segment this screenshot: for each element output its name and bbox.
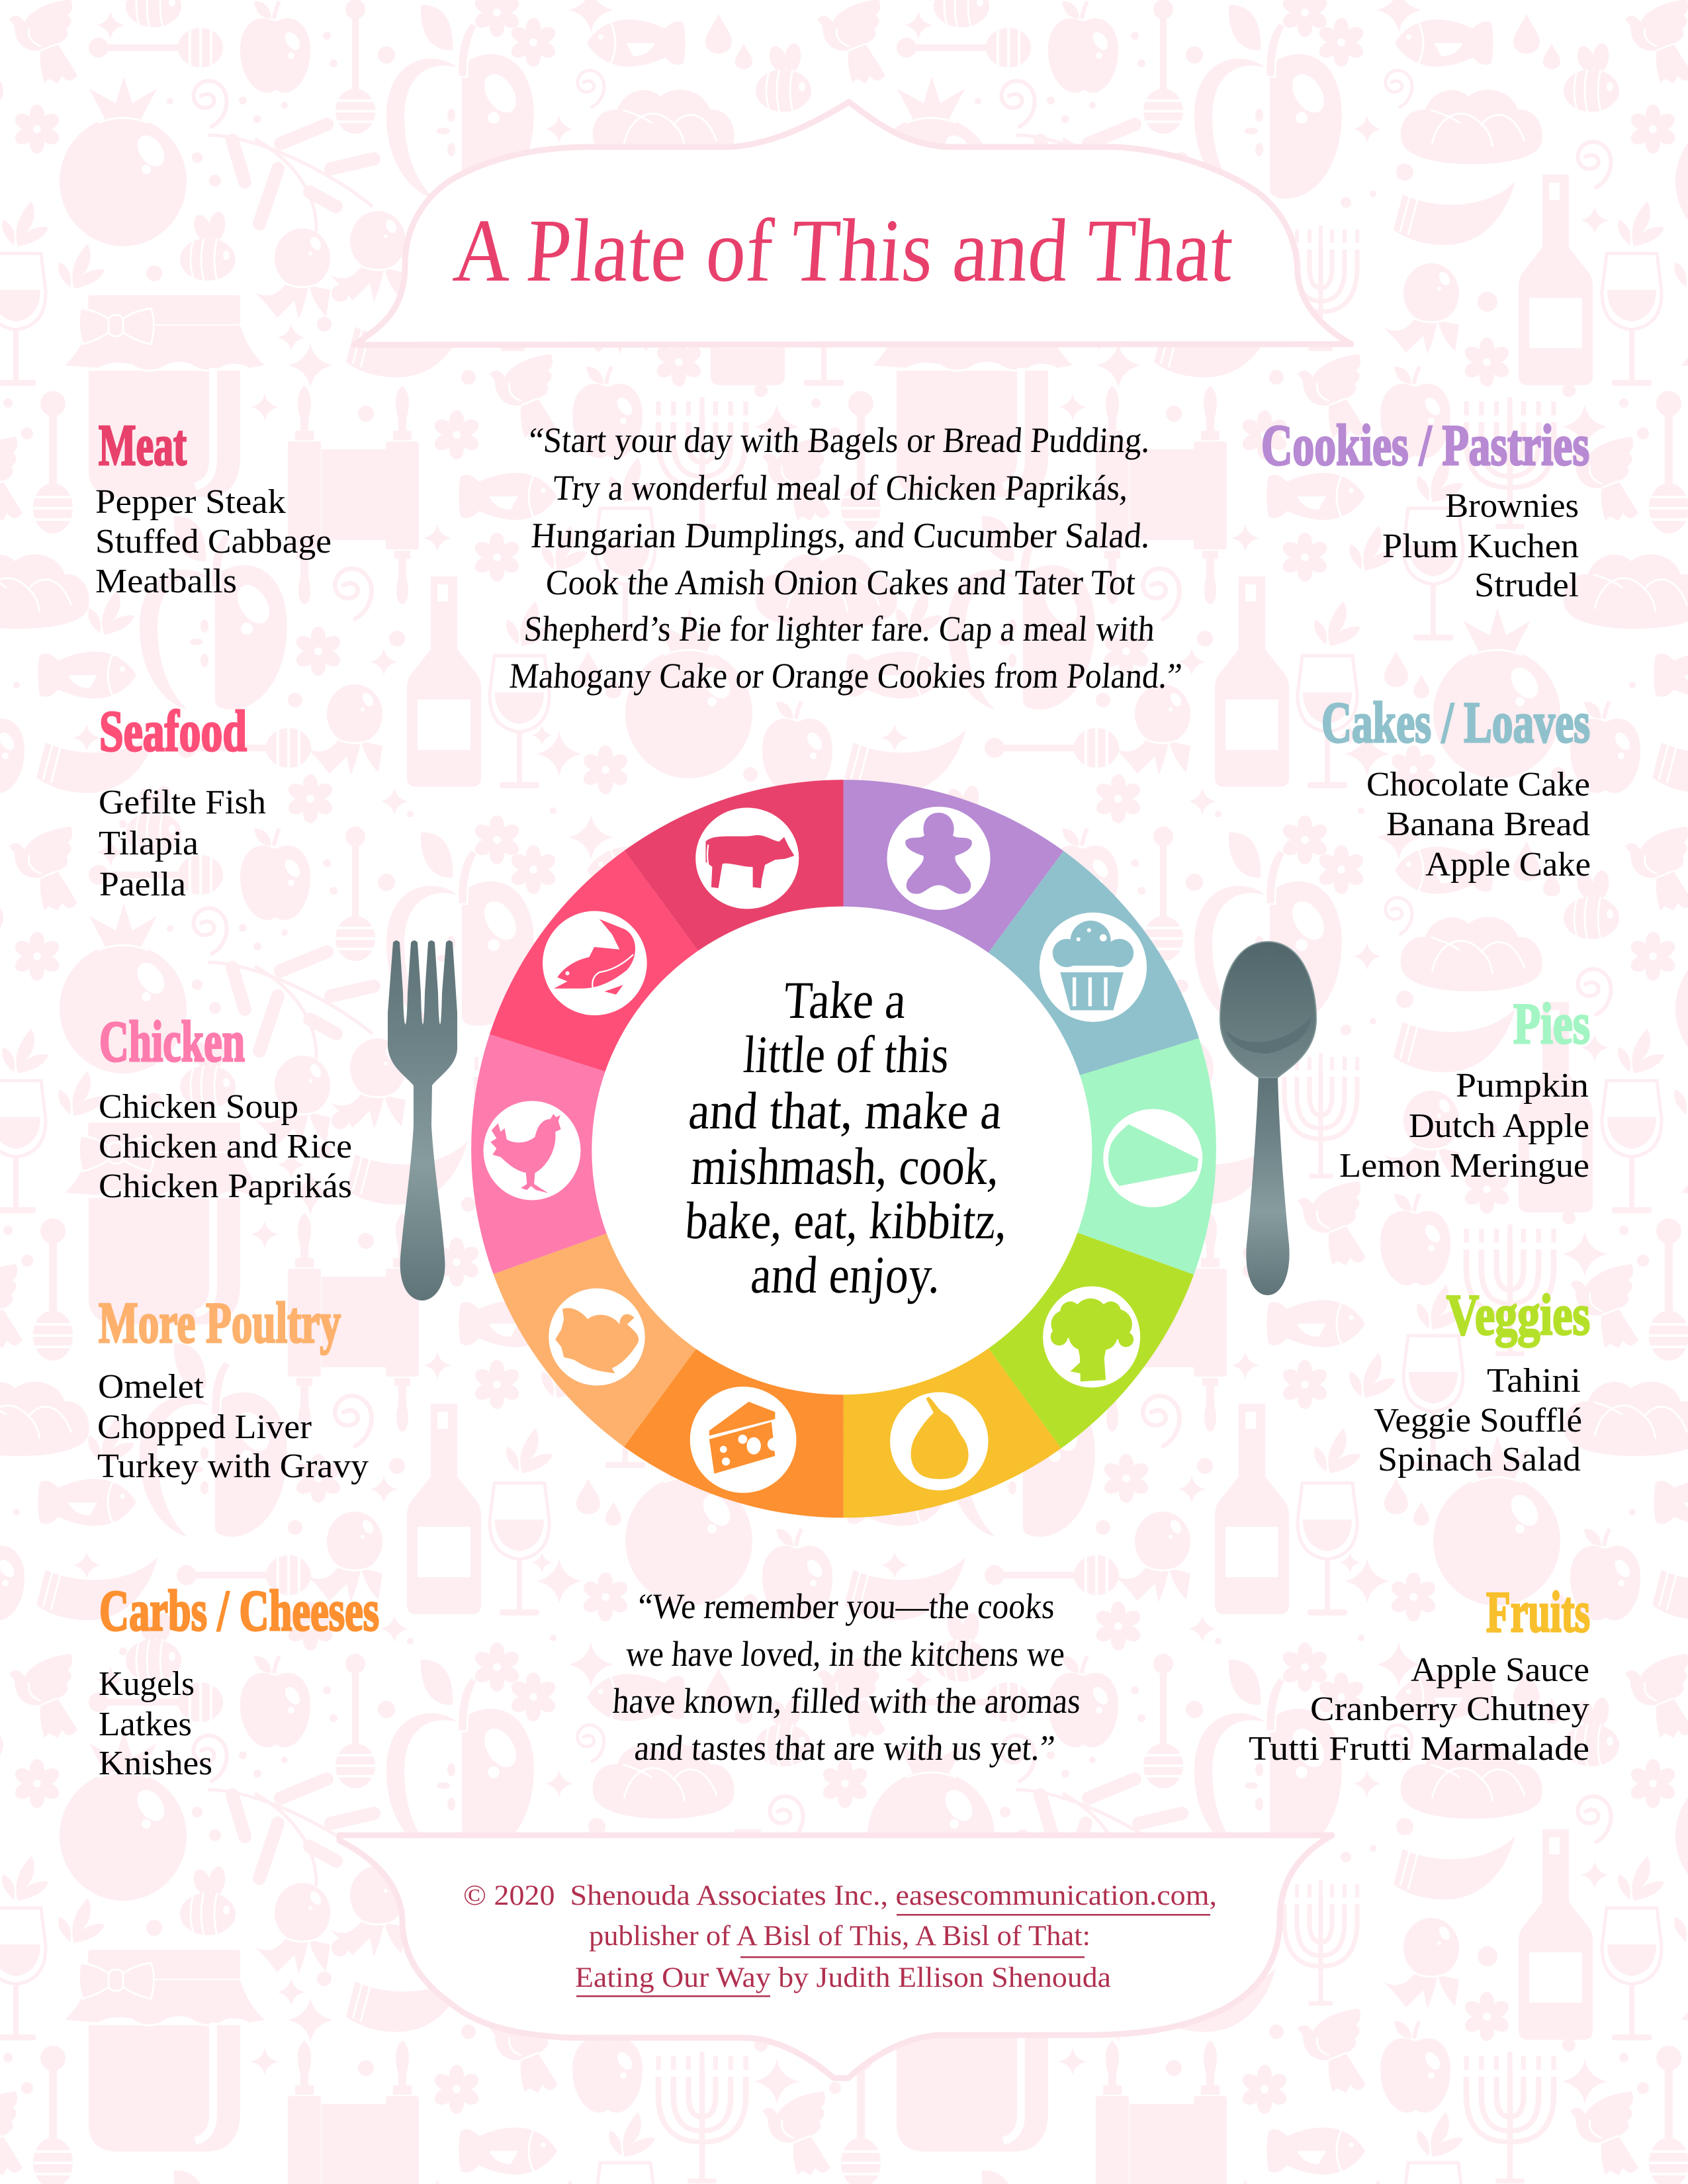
bottom quote: “We remember you—the cooks <box>637 1586 1056 1626</box>
heading: Chicken: Chicken <box>99 1010 245 1074</box>
list: Meat: Pepper Steak <box>95 483 286 521</box>
icon: spoon <box>1220 942 1316 1295</box>
top quote <box>508 420 1183 696</box>
list: Veggies: Veggie Soufflé <box>1374 1402 1582 1439</box>
plate center text: bake, eat, kibbitz, <box>684 1192 1009 1250</box>
list: Carbs / Cheeses <box>99 1665 212 1782</box>
list: Pies <box>1339 1067 1589 1185</box>
list: Chicken: Chicken Paprikás <box>99 1167 352 1205</box>
plate center text: mishmash, cook, <box>689 1138 1001 1196</box>
bottom quote: and tastes that are with us yet.” <box>633 1728 1056 1768</box>
plate center text: and that, make a <box>687 1082 1004 1140</box>
icon: cupcake <box>1040 913 1147 1022</box>
plate center text <box>684 972 1009 1304</box>
title: A Plate of This and That <box>451 201 1236 300</box>
list: Cakes / Loaves: Banana Bread <box>1386 805 1590 843</box>
icon: broccoli <box>1043 1287 1140 1388</box>
title plaque <box>354 102 1351 345</box>
top quote: Shepherd’s Pie for lighter fare. Cap a meal with <box>523 609 1156 649</box>
list: Chicken: Chicken and Rice <box>99 1128 352 1165</box>
bottom quote: we have loved, in the kitchens we <box>625 1634 1066 1674</box>
plate wheel <box>471 780 1216 1518</box>
icon: pear <box>890 1392 989 1490</box>
list: Veggies <box>1374 1362 1582 1479</box>
list: Seafood: Paella <box>99 866 186 903</box>
list: Meat: Stuffed Cabbage <box>95 523 332 561</box>
heading: Meat: Meat <box>99 414 187 478</box>
list: Meat: Meatballs <box>95 563 237 600</box>
list: More Poultry: Turkey with Gravy <box>97 1447 369 1485</box>
list: Fruits: Apple Sauce <box>1411 1651 1589 1689</box>
list: Chicken <box>99 1088 352 1205</box>
list: Meat <box>95 483 332 600</box>
list: Pies: Lemon Meringue <box>1339 1147 1589 1185</box>
footer plaque <box>339 1835 1332 2078</box>
wheel segments <box>471 780 1216 1518</box>
icon: cheese <box>690 1387 796 1493</box>
list: Pies: Dutch Apple <box>1409 1107 1589 1145</box>
icon: fish <box>543 911 647 1015</box>
list: Fruits: Tutti Frutti Marmalade <box>1249 1730 1589 1768</box>
list: Cookies / Pastries <box>1382 487 1579 604</box>
list: Cakes / Loaves: Chocolate Cake <box>1366 766 1590 803</box>
list: Pies: Pumpkin <box>1456 1067 1589 1105</box>
bottom quote: have known, filled with the aromas <box>611 1681 1082 1721</box>
heading: More Poultry: More Poultry <box>99 1291 341 1355</box>
list: Veggies: Tahini <box>1487 1362 1581 1400</box>
list: Fruits <box>1249 1651 1589 1768</box>
list: Cookies / Pastries: Brownies <box>1445 487 1579 525</box>
heading: Cookies / Pastries: Cookies / Pastries <box>1261 414 1589 478</box>
list: Cakes / Loaves: Apple Cake <box>1425 846 1591 884</box>
list: Chicken: Chicken Soup <box>99 1088 298 1126</box>
top quote: “Start your day with Bagels or Bread Pudding. <box>527 420 1151 460</box>
list: Veggies: Spinach Salad <box>1378 1441 1581 1479</box>
list: Carbs / Cheeses: Kugels <box>99 1665 195 1703</box>
list: Carbs / Cheeses: Latkes <box>99 1706 192 1743</box>
heading: Fruits: Fruits <box>1486 1580 1590 1645</box>
list: Seafood: Tilapia <box>99 825 199 862</box>
top quote: Hungarian Dumplings, and Cucumber Salad. <box>530 516 1151 555</box>
icon: fork <box>388 940 457 1300</box>
plate center text: Take a <box>782 972 908 1030</box>
heading: Cakes / Loaves: Cakes / Loaves <box>1321 691 1590 755</box>
heading: Pies: Pies <box>1513 992 1590 1056</box>
heading: Veggies: Veggies <box>1446 1283 1590 1347</box>
icon: turkey <box>549 1289 645 1386</box>
plate center text: little of this <box>742 1026 951 1084</box>
list: Cookies / Pastries: Plum Kuchen <box>1382 527 1579 565</box>
list: Seafood: Gefilte Fish <box>99 784 266 821</box>
top quote: Mahogany Cake or Orange Cookies from Poland.” <box>508 656 1183 696</box>
list: Cookies / Pastries: Strudel <box>1474 567 1579 604</box>
heading: Carbs / Cheeses: Carbs / Cheeses <box>99 1579 379 1643</box>
footer credits <box>463 1880 1217 1997</box>
top quote: Cook the Amish Onion Cakes and Tater Tot <box>545 563 1137 602</box>
icon: cow <box>695 807 799 909</box>
heading: Seafood: Seafood <box>99 700 247 764</box>
top quote: Try a wonderful meal of Chicken Paprikás, <box>552 468 1130 508</box>
icon: gingerbread cookie <box>887 807 991 910</box>
list: More Poultry: Chopped Liver <box>97 1408 312 1446</box>
bottom quote <box>611 1586 1082 1768</box>
plate center text: and enjoy. <box>749 1246 942 1304</box>
footer credits: © 2020 Shenouda Associates Inc., easescommunication.com, <box>463 1880 1217 1911</box>
icon: hen <box>484 1101 580 1200</box>
footer credits: publisher of A Bisl of This, A Bisl of That: <box>589 1921 1090 1952</box>
list: Seafood <box>99 784 266 903</box>
icon: pie slice <box>1103 1109 1202 1207</box>
footer credits: Eating Our Way by Judith Ellison Shenouda <box>575 1962 1111 1993</box>
list: Fruits: Cranberry Chutney <box>1310 1690 1589 1728</box>
list: Carbs / Cheeses: Knishes <box>99 1745 212 1782</box>
list: More Poultry <box>97 1368 369 1485</box>
list: Cakes / Loaves <box>1366 766 1591 884</box>
list: More Poultry: Omelet <box>98 1368 204 1406</box>
